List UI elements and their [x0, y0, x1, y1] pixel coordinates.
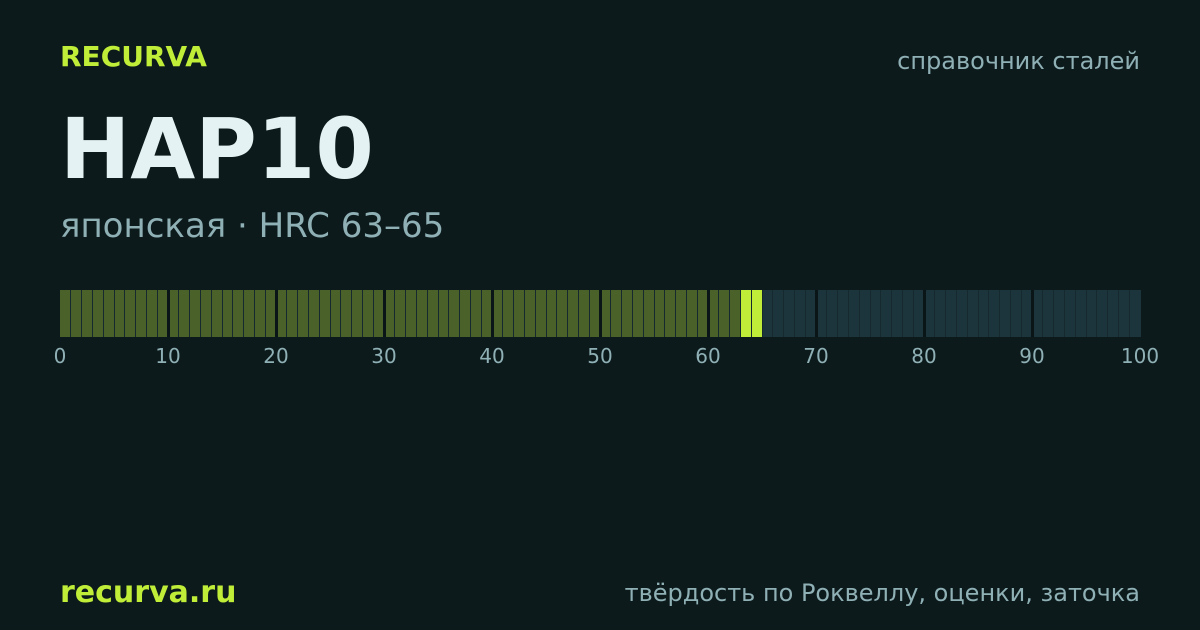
scale labels: 50 — [587, 344, 613, 368]
remaining segments 65–100 — [763, 290, 1141, 337]
footer description: твёрдость по Роквеллу, оценки, заточка — [625, 579, 1140, 607]
scale labels: 60 — [695, 344, 721, 368]
hardness bar chart — [60, 290, 1141, 337]
title: steel name: HAP10 — [60, 100, 374, 198]
brand logo: RECURVA — [60, 40, 207, 73]
footer site link: recurva.ru — [60, 575, 236, 610]
scale labels: 70 — [803, 344, 829, 368]
highlighted range 63–65 — [741, 290, 762, 337]
scale labels: 20 — [263, 344, 289, 368]
header caption: справочник сталей — [897, 47, 1140, 75]
scale labels: 90 — [1019, 344, 1045, 368]
scale labels: 80 — [911, 344, 937, 368]
scale labels: 40 — [479, 344, 505, 368]
scale labels — [54, 344, 1159, 368]
scale labels: 0 — [54, 344, 66, 368]
scale labels: 100 — [1121, 344, 1159, 368]
scale labels: 10 — [155, 344, 181, 368]
subtitle: origin and hardness: японская · HRC 63–65 — [60, 206, 444, 246]
scale labels: 30 — [371, 344, 397, 368]
filled segments 0–63 — [60, 290, 740, 337]
